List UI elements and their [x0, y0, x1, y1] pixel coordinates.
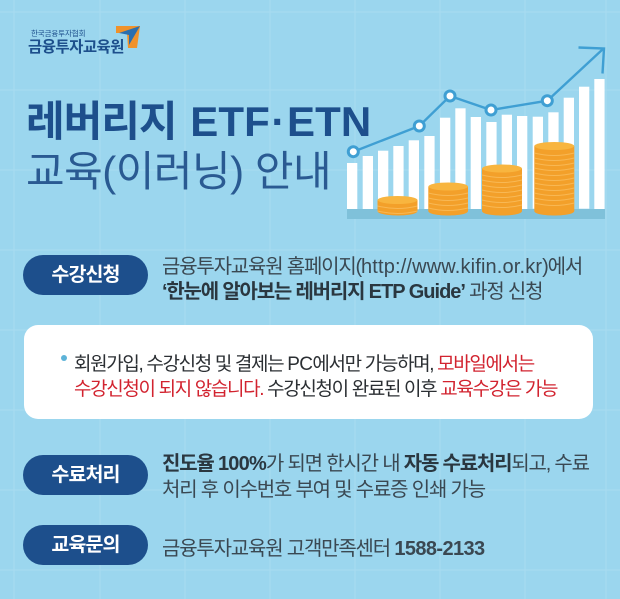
notice panel: [24, 325, 593, 419]
text: application instructions: [162, 256, 582, 302]
logo small caption: 한국금융투자협회: [31, 29, 85, 38]
icon: logo arrow mark: [116, 26, 140, 48]
coin stack 2: [428, 182, 468, 216]
logo: 금융투자교육원: [28, 26, 140, 56]
label pill: 수강신청: 수강신청: [51, 264, 120, 286]
text: application instructions: ‘한눈에 알아보는 레버리지 ETP Guide’ 과정 신청: [162, 280, 542, 302]
notice text: 회원가입, 수강신청 및 결제는 PC에서만 가능하며, 모바일에서는: [74, 354, 534, 374]
text: completion details: 처리 후 이수번호 부여 및 수료증 인쇄 가능: [162, 479, 485, 501]
chart base band: [347, 209, 605, 219]
label pill: 교육문의: [23, 525, 148, 565]
text: contact: 금융투자교육원 고객만족센터 1588-2133: [162, 538, 485, 560]
coin stack 4: [534, 142, 574, 216]
chart illustration: rising bars, coins and arrow: [346, 46, 606, 219]
text: application instructions: 금융투자교육원 홈페이지(http://www.kifin.or.kr)에서: [162, 256, 582, 278]
notice text: 수강신청이 되지 않습니다. 수강신청이 완료된 이후 교육수강은 가능: [74, 378, 557, 400]
trend line with arrow: [353, 48, 604, 152]
text: completion details: [162, 453, 589, 501]
text: completion details: 진도율 100%가 되면 한시간 내 자동 수료처리되고, 수료: [162, 453, 589, 475]
label pill: 교육문의: 교육문의: [51, 534, 120, 556]
label pill: 수강신청: [23, 255, 148, 295]
label pill: 수료처리: 수료처리: [51, 464, 120, 486]
icon: bullet: [61, 355, 67, 361]
coin stack 1: [378, 196, 418, 216]
logo wordmark: 금융투자교육원: [28, 39, 124, 56]
trend line markers: [348, 91, 552, 157]
coin stack 3: [482, 164, 522, 216]
label pill: 수료처리: [23, 455, 148, 495]
white bars: [347, 79, 605, 209]
notice text: [74, 354, 558, 400]
title line 2: 교육(이러닝) 안내: [26, 148, 331, 195]
title line 1: 레버리지 ETF·ETN: [26, 98, 371, 145]
